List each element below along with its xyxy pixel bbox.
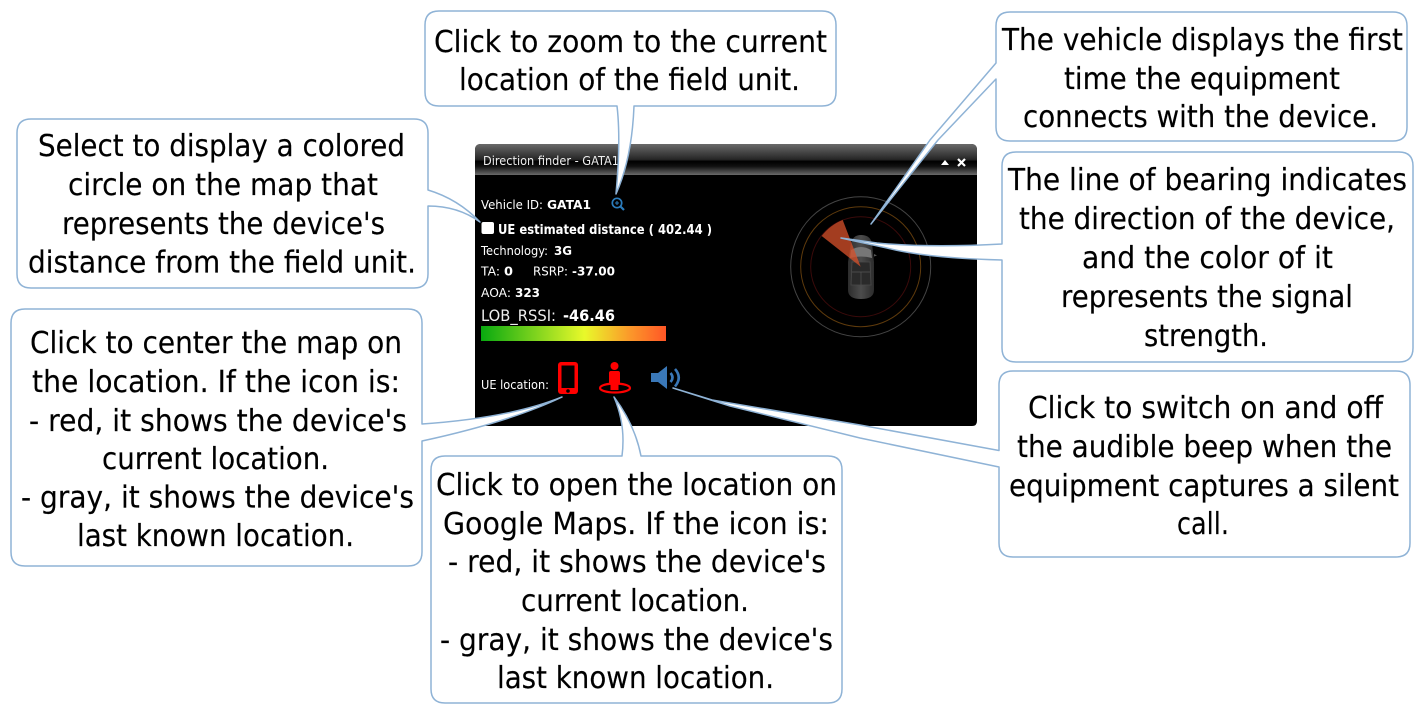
vehicle id: GATA1 <box>547 198 591 212</box>
callout: center map on location: the location. If the icon is: <box>32 365 400 400</box>
ue location label: UE location: <box>481 378 549 392</box>
callout: open in google maps: - gray, it shows the device's <box>440 623 833 658</box>
checkbox <box>482 222 494 234</box>
callout: audible beep <box>673 371 1410 557</box>
callout: distance circle checkbox: Select to display a colored <box>38 129 405 164</box>
callout: line of bearing: strength. <box>1144 319 1268 354</box>
icon: speaker <box>651 366 679 389</box>
callout: line of bearing: represents the signal <box>1061 280 1353 315</box>
signal gradient bar <box>481 326 666 341</box>
window background <box>475 144 977 426</box>
callout: line of bearing <box>841 152 1413 362</box>
callout: center map on location: - gray, it shows the device's <box>21 480 414 516</box>
aoa <box>481 286 540 300</box>
estimated distance label: UE estimated distance ( 402.44 ) <box>498 223 712 238</box>
vehicle <box>848 235 877 299</box>
callout: center map on location: - red, it shows the device's <box>29 404 407 439</box>
callout: center map on location: last known location. <box>77 519 354 554</box>
callout: open in google maps: - red, it shows the device's <box>448 545 826 580</box>
callout: distance circle checkbox: circle on the map that <box>68 168 378 203</box>
technology: Technology: <box>480 244 548 258</box>
callout: open in google maps <box>431 397 842 703</box>
callout: vehicle first connection: The vehicle displays the first <box>1001 23 1403 58</box>
aoa: AOA: <box>481 286 511 300</box>
callout: audible beep: the audible beep when the <box>1017 430 1392 465</box>
icon: person on location ring <box>600 362 630 392</box>
callout: distance circle checkbox <box>17 119 480 288</box>
callout: center map on location: current location. <box>102 442 329 477</box>
callout: zoom to field unit: Click to zoom to the current <box>434 25 827 60</box>
ta and rsrp: 0 <box>504 264 513 278</box>
callout: audible beep: equipment captures a silent <box>1009 469 1399 504</box>
icon: zoom magnifier <box>612 198 624 210</box>
aoa: 323 <box>515 286 540 300</box>
callout: center map on location <box>11 309 562 566</box>
callout: center map on location: Click to center the map on <box>30 326 402 361</box>
title bar <box>475 144 977 175</box>
callout: audible beep: Click to switch on and off <box>1028 391 1384 426</box>
callout: distance circle checkbox: distance from the field unit. <box>28 246 416 280</box>
callout: vehicle first connection: connects with the device. <box>1023 100 1378 135</box>
callout: vehicle first connection <box>871 12 1407 224</box>
lob rssi: LOB_RSSI: <box>481 306 556 326</box>
lob rssi <box>481 306 615 326</box>
callout: zoom to field unit <box>425 11 836 194</box>
callout: line of bearing: The line of bearing indicates <box>1007 163 1407 198</box>
callout: open in google maps: last known location. <box>497 661 774 696</box>
vehicle id <box>481 198 591 212</box>
ta and rsrp: -37.00 <box>572 264 615 278</box>
callout: zoom to field unit: location of the field unit. <box>459 63 800 98</box>
icon: phone <box>558 362 578 394</box>
callout: open in google maps: current location. <box>521 584 749 619</box>
ta and rsrp: RSRP: <box>533 264 568 278</box>
callout: audible beep: call. <box>1177 507 1229 542</box>
panel: direction finder window <box>475 144 977 426</box>
icon: collapse triangle <box>941 160 949 165</box>
icon: close <box>958 159 965 166</box>
line of bearing sector <box>822 220 861 267</box>
technology: 3G <box>554 244 572 258</box>
callout: line of bearing: and the color of it <box>1082 241 1333 276</box>
ta and rsrp: TA: <box>480 264 500 278</box>
callout: open in google maps: Click to open the location on <box>436 468 837 503</box>
callout: line of bearing: the direction of the device, <box>1019 202 1395 237</box>
callout: vehicle first connection: time the equipment <box>1064 62 1340 97</box>
lob rssi: -46.46 <box>563 306 615 325</box>
window title: Direction finder - GATA1 <box>483 154 619 168</box>
radar rings <box>791 197 931 337</box>
callout: open in google maps: Google Maps. If the icon is: <box>443 507 829 542</box>
vehicle id: Vehicle ID: <box>481 198 543 212</box>
callout: distance circle checkbox: represents the device's <box>62 207 385 242</box>
ta and rsrp <box>480 264 615 278</box>
